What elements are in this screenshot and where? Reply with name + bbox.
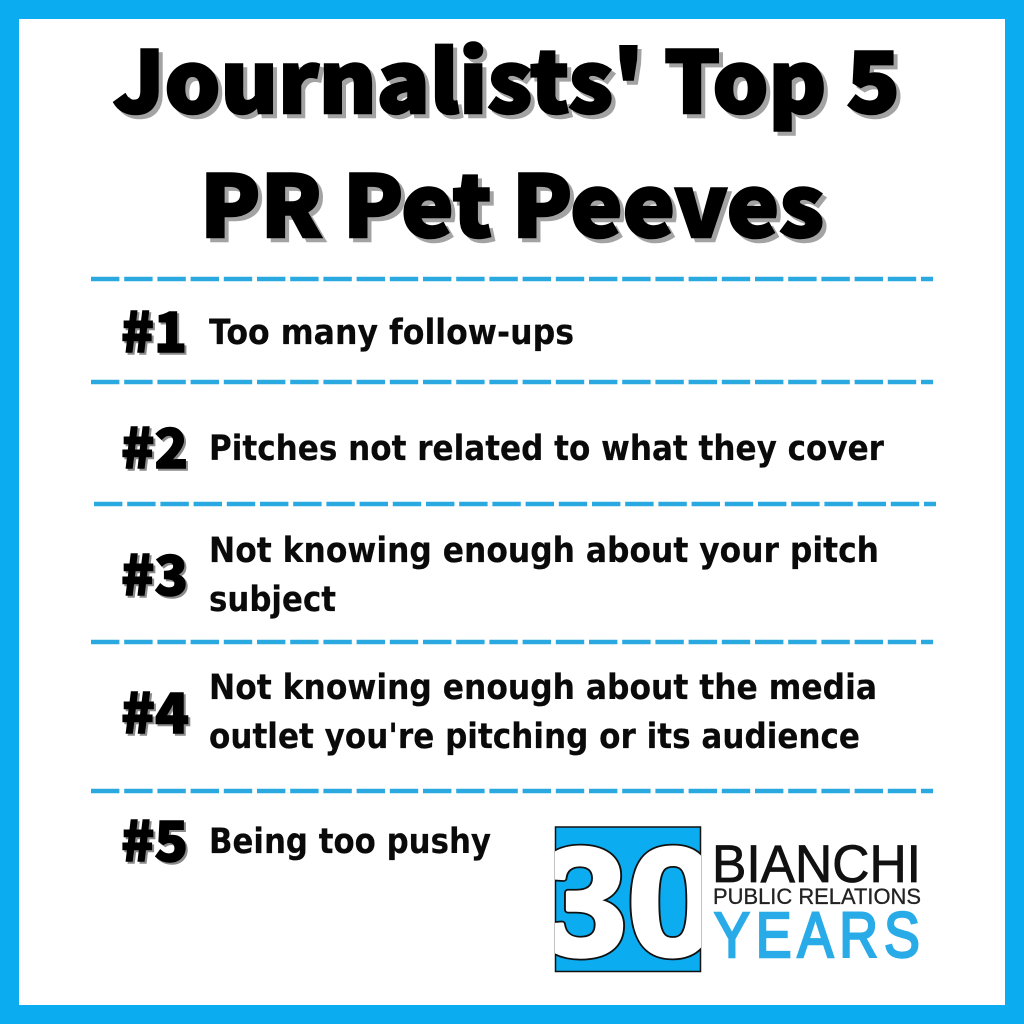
logo wordmark: BIANCHI [712, 835, 921, 894]
logo wordmark [712, 835, 921, 971]
rank #5: #5 [123, 799, 190, 879]
logo: Bianchi Public Relations 30 Years [554, 826, 920, 972]
item 1 [121, 288, 574, 370]
item text 4 [209, 668, 877, 757]
rank #3: #3 [123, 533, 190, 613]
rank #1: #1 [121, 288, 187, 368]
item text 3: subject [209, 580, 336, 620]
rank #1: #1 [123, 290, 189, 370]
rank #2: #2 [121, 404, 188, 484]
title: PR Pet Peeves [204, 143, 828, 266]
item text 4: Not knowing enough about the media [209, 668, 877, 708]
logo wordmark: PUBLIC RELATIONS [713, 884, 921, 909]
logo badge: 30: 30 [535, 816, 719, 988]
item text 3: Not knowing enough about your pitch [209, 531, 879, 571]
item 3 [121, 531, 879, 620]
rank #5: #5 [121, 797, 188, 877]
item 5 [121, 797, 491, 879]
title: Journalists' Top 5 [113, 15, 900, 138]
logo badge: 30: 30 [535, 816, 719, 988]
logo wordmark: YEARS [714, 899, 920, 971]
title: Journalists' Top 5 [117, 19, 904, 142]
rank #4: #4 [123, 671, 191, 751]
rank #4: #4 [121, 669, 189, 749]
title: PR Pet Peeves [200, 139, 824, 262]
item text 3 [209, 531, 879, 620]
item text 5: Being too pushy [209, 822, 491, 862]
item 2 [121, 404, 884, 486]
item text 4: outlet you're pitching or its audience [209, 717, 860, 757]
rank #2: #2 [123, 406, 190, 486]
item text 2: Pitches not related to what they cover [209, 429, 884, 469]
rank #3: #3 [121, 531, 188, 611]
item 4 [121, 668, 877, 757]
item text 1: Too many follow-ups [209, 313, 574, 353]
title [113, 15, 904, 266]
